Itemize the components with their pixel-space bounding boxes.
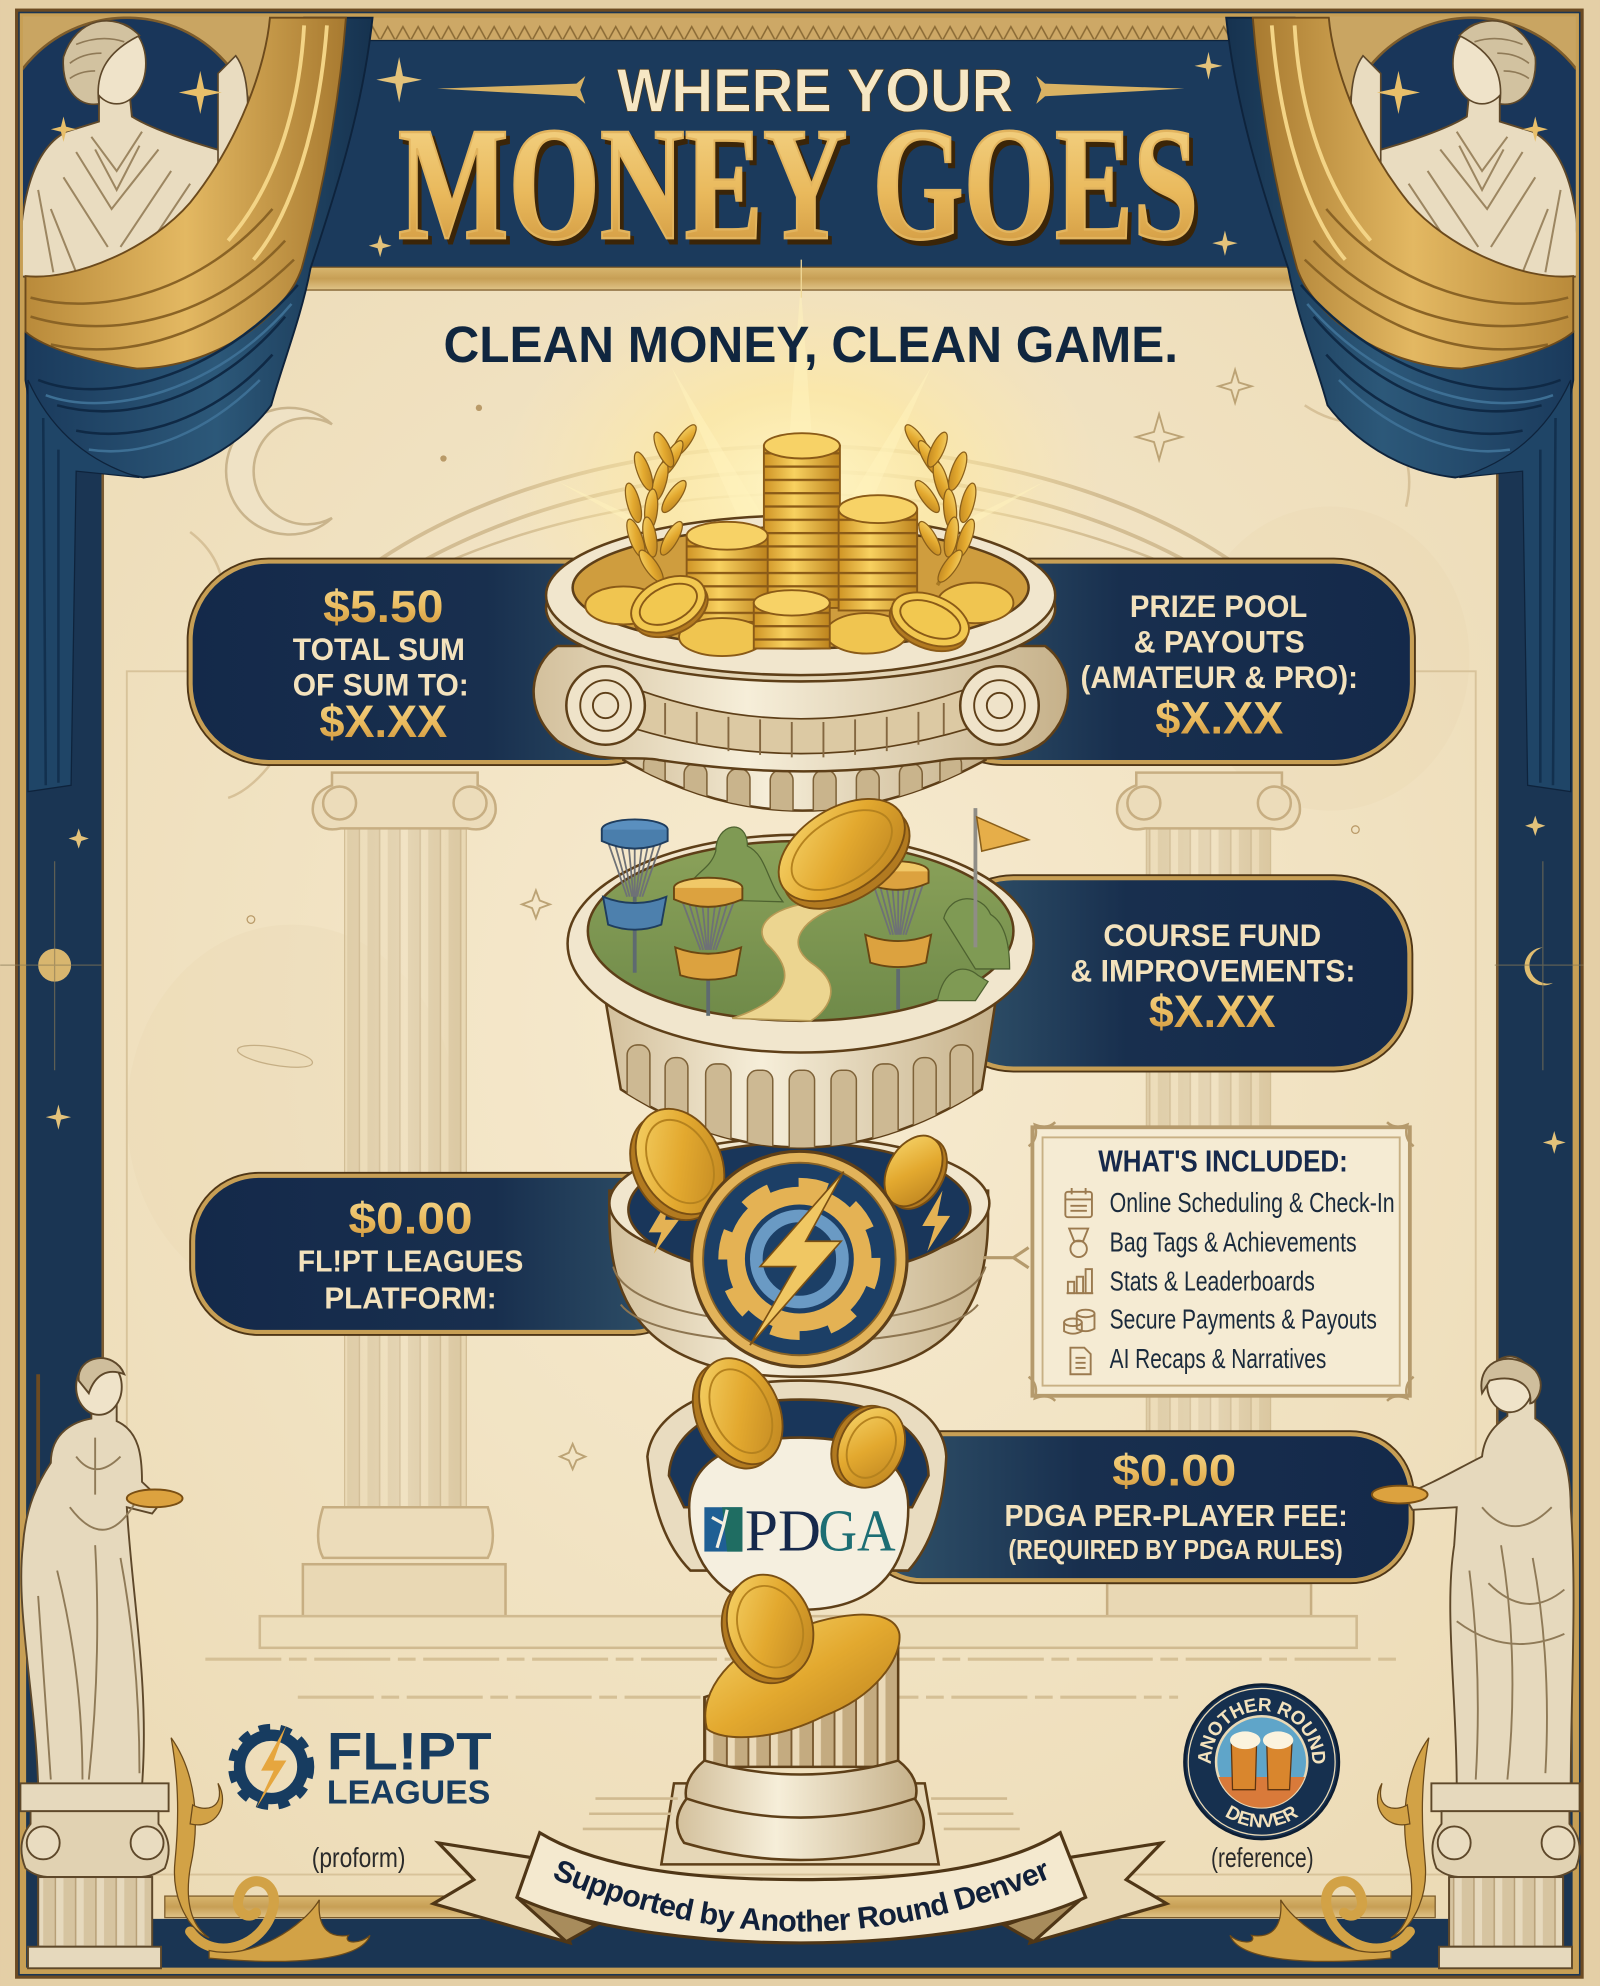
pdga logo (704, 1497, 896, 1563)
tier 1: coin bowl capital (534, 515, 1068, 833)
amount $5.50: $5.50 (323, 581, 443, 632)
tier 4: pdga drum (647, 1381, 946, 1610)
coin stack right (839, 495, 917, 610)
panel: platform (190, 1173, 699, 1335)
title: money goes: MONEY GOES (398, 95, 1198, 274)
icon: calendar (1065, 1188, 1092, 1217)
label prize pool: PRIZE POOL (1130, 588, 1307, 624)
amount platform: $0.00 (348, 1195, 473, 1244)
left bottom statue (21, 1358, 183, 1786)
caption proform: (proform) (312, 1842, 405, 1873)
header band (298, 18, 1301, 298)
icon: medal (1069, 1229, 1088, 1257)
logo text another round: ANOTHER ROUND (1198, 1698, 1326, 1764)
column base (677, 1761, 924, 1860)
panel: prize pool (922, 559, 1415, 765)
right statue bust niche (1246, 16, 1600, 281)
label course fund: COURSE FUND (1103, 917, 1321, 953)
ribbon banner (430, 1830, 1170, 1946)
bottom gold band (165, 1896, 1435, 1918)
left pedestal (20, 1783, 169, 1968)
right bottom statue (1372, 1357, 1574, 1786)
panel: pdga fee (859, 1431, 1414, 1583)
caption reference: (reference) (1211, 1842, 1314, 1873)
connector to included box (983, 1248, 1029, 1268)
panel: total sum (188, 559, 687, 765)
flipt leagues logo (232, 1722, 492, 1811)
glow behind coins (497, 272, 1105, 703)
icon: flag (975, 808, 1029, 947)
subtitle: CLEAN MONEY, CLEAN GAME. (443, 316, 1178, 373)
left gold filigree (171, 1738, 370, 1961)
icon: flipt gear medallion (692, 1151, 907, 1367)
hill and trees (689, 827, 1010, 1001)
parchment panel (101, 285, 1499, 1919)
right background column (1107, 773, 1311, 1617)
tier 3: platform drum (609, 1137, 989, 1377)
flipt wordmark: FL!PT (327, 1722, 492, 1781)
icon: flipt gear (232, 1725, 310, 1809)
icon: right small bolt (922, 1191, 950, 1251)
right gold filigree (1230, 1738, 1429, 1961)
icon: coins (1064, 1310, 1094, 1334)
label payouts: & PAYOUTS (1134, 623, 1305, 659)
right curtain (1226, 18, 1573, 792)
decorative moon and stars (226, 370, 1359, 1469)
item stats: Stats & Leaderboards (1110, 1266, 1315, 1297)
title: money goes: MONEY GOES (402, 100, 1202, 279)
label total sum: TOTAL SUM (293, 631, 465, 667)
coin stack left (687, 522, 768, 622)
right pedestal (1431, 1783, 1580, 1968)
background temple (205, 446, 1400, 1697)
tier 5: broken column (583, 1615, 1020, 1864)
label amateur and pro: (AMATEUR & PRO): (1081, 659, 1358, 695)
panel: course fund (935, 875, 1412, 1072)
leagues wordmark: LEAGUES (327, 1774, 490, 1811)
title flourish left (437, 76, 585, 104)
icon: left small bolt (649, 1198, 679, 1254)
amount course: $X.XX (1149, 986, 1276, 1037)
falling coin 1 (761, 778, 928, 930)
item recaps: AI Recaps & Narratives (1110, 1343, 1326, 1374)
left curtain (25, 18, 373, 792)
title: where your: WHERE YOUR (617, 56, 1013, 124)
label required: (REQUIRED BY PDGA RULES) (1008, 1534, 1343, 1565)
label flipt leagues: FL!PT LEAGUES (298, 1245, 523, 1279)
coin right of medallion (873, 1125, 959, 1219)
icon: left volute (566, 666, 645, 745)
laurel right (901, 422, 979, 585)
side panels night sky (0, 816, 1583, 1154)
icon: blue disc golf basket (602, 819, 668, 973)
item scheduling: Online Scheduling & Check-In (1110, 1187, 1395, 1218)
amount prize: $X.XX (1155, 692, 1283, 743)
tilted coin right (882, 582, 977, 662)
falling coin 4 (707, 1562, 828, 1696)
logo text denver: DENVER (1225, 1805, 1299, 1828)
label per player fee: PDGA PER-PLAYER FEE: (1005, 1499, 1348, 1533)
tilted coin left (622, 565, 717, 648)
coin pile (585, 433, 1013, 662)
gold bowl left (127, 1490, 183, 1507)
coin left of medallion (611, 1093, 743, 1236)
ribbon text: Supported by Another Round Denver (554, 1861, 1046, 1932)
label improvements: & IMPROVEMENTS: (1070, 953, 1355, 989)
amount total: $X.XX (319, 696, 447, 747)
falling coin 2 (676, 1345, 799, 1482)
gold bowl right (1372, 1486, 1428, 1503)
background arch (374, 446, 1235, 564)
pdga logo: PD (745, 1497, 821, 1563)
left background column (303, 773, 506, 1617)
icon: document (1070, 1348, 1091, 1374)
temple steps (260, 1616, 1357, 1648)
tier 2: course bowl (568, 827, 1034, 1172)
coin stack front (754, 590, 830, 648)
left statue bust niche (0, 16, 352, 281)
item bag tags: Bag Tags & Achievements (1110, 1226, 1357, 1257)
laurel left (622, 422, 700, 585)
loose coins (585, 583, 1013, 656)
falling coin 3 (819, 1394, 918, 1500)
panel: what's included (1029, 1122, 1414, 1401)
title flourish right (1036, 76, 1184, 104)
amount pdga: $0.00 (1112, 1447, 1236, 1496)
heading included: WHAT'S INCLUDED: (1098, 1145, 1348, 1179)
icon: gold disc golf basket center (674, 878, 742, 1016)
icon: bars (1067, 1269, 1093, 1293)
another round logo (1183, 1683, 1340, 1840)
icon: gold disc golf basket right (865, 861, 931, 1009)
item payments: Secure Payments & Payouts (1110, 1304, 1377, 1335)
melted coin on column (705, 1615, 900, 1737)
fairway path (732, 901, 851, 1021)
label platform: PLATFORM: (324, 1281, 497, 1315)
icon: right volute (960, 666, 1039, 745)
label of sum to: OF SUM TO: (293, 666, 469, 702)
plinth (661, 1783, 939, 1864)
pdga logo: GA (818, 1497, 896, 1563)
coin stack tall (764, 433, 840, 608)
column shaft (704, 1634, 898, 1767)
